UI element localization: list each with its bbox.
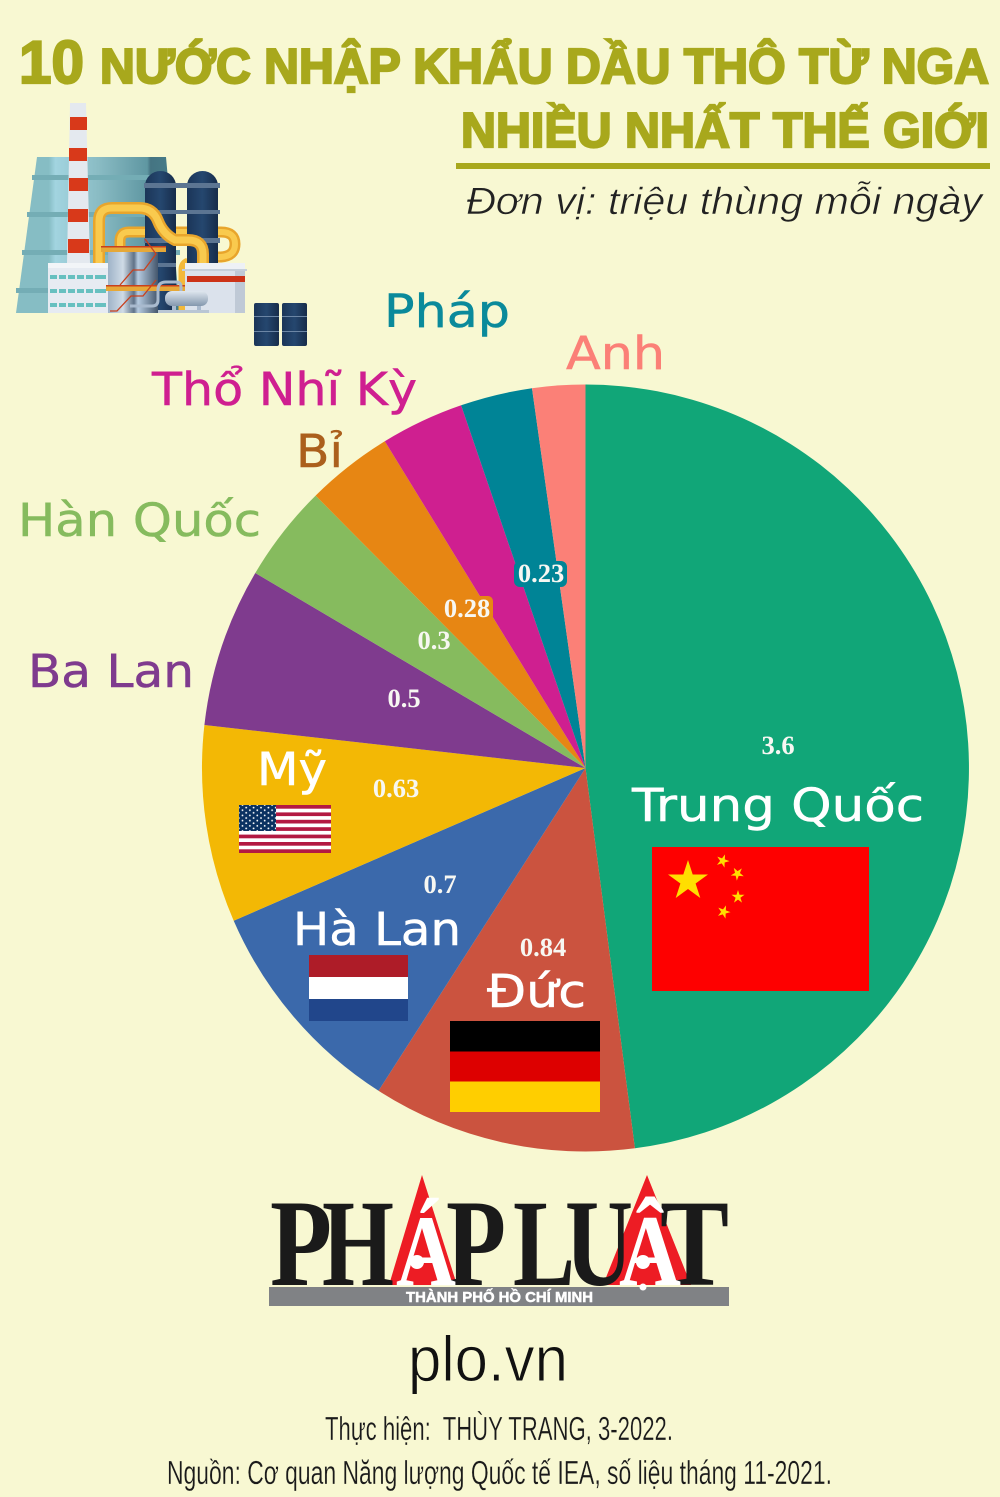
logo: Pháp Luật: T — [660, 1175, 729, 1312]
title: NHIỀU NHẤT THẾ GIỚI — [461, 103, 989, 158]
title — [19, 29, 990, 169]
website: plo.vn — [408, 1323, 568, 1395]
label: Bỉ: Bỉ — [296, 425, 343, 478]
logo: Pháp Luật: U — [565, 1175, 633, 1312]
icon: oil refinery — [16, 103, 247, 313]
value: Hà Lan: 0.7 — [423, 869, 457, 899]
flag: Netherlands — [309, 955, 408, 1021]
flag: China — [652, 847, 869, 991]
flag: USA — [239, 805, 331, 853]
logo: Pháp Luật: THÀNH PHỐ HỒ CHÍ MINH — [406, 1288, 593, 1306]
title: 10 — [19, 29, 84, 96]
label: Hà Lan: Hà Lan — [293, 903, 461, 956]
label: Thổ Nhĩ Kỳ: Thổ Nhĩ Kỳ — [151, 363, 417, 416]
value: Pháp: 0.23 — [518, 558, 564, 588]
logo: Pháp Luật: L — [513, 1175, 575, 1312]
credit: Thực hiện: THÙY TRANG, 3-2022. — [325, 1410, 673, 1447]
unit subtitle: Đơn vị: triệu thùng mỗi ngày — [466, 179, 984, 223]
label: Anh: Anh — [566, 327, 665, 380]
label: Hàn Quốc: Hàn Quốc — [18, 494, 261, 547]
icon: oil barrels — [254, 303, 307, 346]
pie chart — [202, 384, 969, 1151]
value: Đức: 0.84 — [520, 932, 566, 962]
value: Mỹ: 0.63 — [373, 773, 419, 803]
logo: Pháp Luật: Á — [396, 1195, 456, 1308]
label: Mỹ: Mỹ — [257, 743, 327, 796]
label: Pháp: Pháp — [384, 285, 510, 338]
label: Trung Quốc: Trung Quốc — [631, 779, 924, 832]
label: Đức: Đức — [487, 965, 586, 1018]
value: Ba Lan: 0.5 — [387, 683, 421, 713]
label: Ba Lan: Ba Lan — [28, 645, 194, 698]
value: Hàn Quốc: 0.3 — [417, 625, 451, 655]
logo: Pháp Luật: P — [270, 1175, 332, 1312]
value: Trung Quốc: 3.6 — [761, 730, 795, 760]
logo: Pháp Luật: H — [322, 1175, 394, 1312]
value: Thổ Nhĩ Kỳ: 0.28 — [444, 593, 490, 623]
logo: Pháp Luật: P — [446, 1175, 506, 1312]
title: NƯỚC NHẬP KHẨU DẦU THÔ TỪ NGA — [100, 39, 989, 94]
flag: Germany — [450, 1021, 600, 1112]
logo: Pháp Luật: Ậ — [619, 1195, 681, 1308]
logo: Pháp Luật — [269, 1175, 729, 1312]
